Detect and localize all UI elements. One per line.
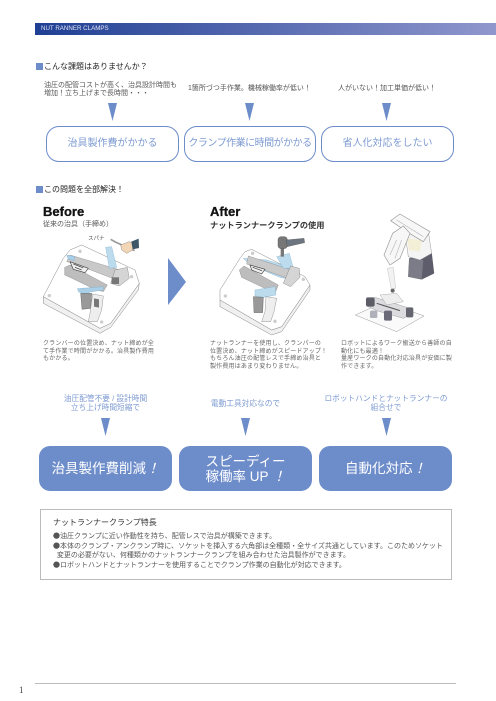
benefit label 1: 油圧配管不要 / 設計時間 bbox=[64, 394, 147, 403]
before subtitle: 従来の治具（手締め） bbox=[43, 221, 113, 228]
robot description: 動化にも最適！ bbox=[341, 349, 384, 355]
result button: speedy: スピーディー bbox=[205, 454, 286, 468]
benefit label 3: 組合せで bbox=[371, 403, 401, 412]
before description: て手作業で時間がかかる。治具製作費用 bbox=[43, 349, 154, 355]
before description: クランバーの位置決め、ナット締めが全 bbox=[43, 341, 154, 347]
benefit label 3: ロボットハンドとナットランナーの bbox=[324, 394, 448, 403]
robot description: 量産ワークの自動化対応治具が安価に製 bbox=[341, 356, 452, 362]
spanner label: スパナ bbox=[88, 236, 105, 242]
benefit label 2: 電動工具対応なので bbox=[211, 399, 280, 408]
features list: ●本体のクランプ・アンクランプ時に、ソケットを挿入する六角部は全種類・全サイズ共通としています。このためソケット bbox=[53, 541, 443, 551]
page number: 1 bbox=[19, 685, 24, 695]
after subtitle: ナットランナークランプの使用 bbox=[210, 221, 324, 230]
header bar: NUT RANNER CLAMPS bbox=[41, 25, 109, 32]
robot description: 作できます。 bbox=[341, 364, 377, 370]
heading: solution: この問題を全部解決！ bbox=[44, 185, 124, 194]
result button: jig cost reduction bbox=[39, 446, 172, 491]
after description: もちろん油圧の配管レスで手締め治具と bbox=[210, 356, 321, 362]
after title: After bbox=[210, 204, 240, 219]
before description bbox=[43, 340, 154, 362]
header bar bbox=[35, 23, 496, 35]
outlined button: jig cost: 治具製作費がかかる bbox=[68, 138, 158, 149]
features title: ナットランナークランプ特長 bbox=[53, 518, 157, 527]
problem text 2: 1箇所づつ手作業。機械稼働率が低い！ bbox=[188, 85, 311, 92]
outlined button: clamping time bbox=[184, 126, 316, 162]
after description: ナットランナーを使用し、クランパーの bbox=[210, 341, 321, 347]
result button: jig cost reduction: 治具製作費削減！ bbox=[52, 461, 160, 476]
problem text 1: 増加！立ち上げまで長時間・・・ bbox=[44, 90, 149, 97]
before description: もかかる。 bbox=[43, 356, 74, 362]
arrow: benefit 3 down bbox=[382, 418, 391, 436]
arrow: problem 2 down bbox=[245, 103, 254, 121]
result button: automation bbox=[319, 446, 452, 491]
after description: 位置決め、ナット締めがスピードアップ！ bbox=[210, 349, 327, 355]
robot description: ロボットによるワーク搬送から善師の自 bbox=[341, 341, 452, 347]
features list: 変更の必要がない、何種類かのナットランナークランプを組み合わせた治具製作ができます。 bbox=[57, 552, 350, 559]
arrow: before to after bbox=[168, 258, 186, 305]
arrow: problem 1 down bbox=[108, 103, 117, 121]
panel: features bbox=[40, 509, 452, 580]
footer rule bbox=[35, 683, 456, 684]
benefit label 1 bbox=[64, 394, 147, 412]
result button: speedy: 稼働率 UP ！ bbox=[205, 468, 286, 484]
after description bbox=[210, 340, 327, 370]
result button: speedy bbox=[179, 446, 312, 491]
arrow: problem 3 down bbox=[382, 103, 391, 121]
outlined button: labor saving bbox=[321, 126, 454, 162]
problem text 1 bbox=[44, 81, 177, 97]
features list: ●油圧クランプに近い作動性を持ち、配管レスで治具が構築できます。 bbox=[53, 531, 276, 541]
features list: ●ロボットハンドとナットランナーを使用することでクランプ作業の自動化が対応できます。 bbox=[53, 560, 346, 570]
before title: Before bbox=[43, 204, 84, 219]
benefit label 1: 立ち上げ時間短縮で bbox=[71, 403, 140, 412]
outlined button: jig cost bbox=[46, 126, 179, 162]
result button: automation: 自動化対応！ bbox=[345, 461, 426, 476]
benefit label 3 bbox=[324, 394, 448, 412]
arrow: benefit 2 down bbox=[241, 418, 250, 436]
after description: 製作費用はあまり変わりません。 bbox=[210, 364, 302, 370]
arrow: benefit 1 down bbox=[101, 418, 110, 436]
outlined button: clamping time: クランプ作業に時間がかかる bbox=[188, 138, 312, 149]
problem text 3: 人がいない！加工単価が低い！ bbox=[338, 85, 436, 92]
robot description bbox=[341, 340, 452, 370]
features list bbox=[53, 531, 443, 570]
outlined button: labor saving: 省人化対応をしたい bbox=[342, 138, 432, 149]
problem text 1: 油圧の配管コストが高く、治具設計時間も bbox=[44, 82, 177, 89]
heading: problems: こんな課題はありませんか？ bbox=[44, 62, 148, 71]
